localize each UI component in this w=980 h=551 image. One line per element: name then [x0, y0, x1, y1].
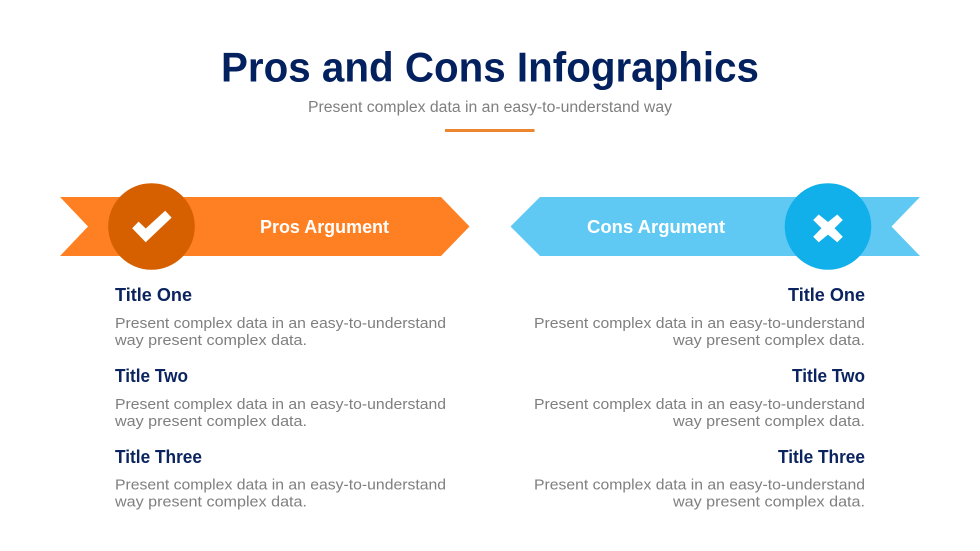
cons item: title two	[534, 366, 865, 430]
pros ribbon banner	[60, 197, 470, 256]
cons item: title three: Present complex data in an easy-to-understand	[534, 476, 865, 494]
subtitle: Present complex data in an easy-to-understand way	[308, 99, 672, 116]
cons item: title one	[534, 285, 865, 349]
pros item: title one: way present complex data.	[114, 332, 307, 349]
icon: check badge	[108, 183, 195, 270]
cons item: title two: way present complex data.	[672, 413, 865, 430]
pros item: title two: Title Two	[115, 366, 188, 386]
pros item: title three: Title Three	[115, 447, 202, 467]
accent rule	[445, 129, 534, 132]
icon: cross badge	[785, 183, 871, 270]
cons item: title one: way present complex data.	[672, 332, 865, 349]
pros heading: Pros Argument	[260, 217, 389, 237]
panel: cons	[510, 183, 920, 510]
cons heading: Cons Argument	[587, 217, 725, 237]
pros item: title two: Present complex data in an easy-to-understand	[115, 396, 446, 413]
pros item: title three	[114, 447, 446, 510]
pros item: title one	[114, 285, 446, 349]
cons item: title three: Title Three	[778, 447, 865, 467]
cons item: title two: Title Two	[792, 366, 865, 386]
cons item: title one: Title One	[788, 285, 865, 305]
pros item: title one: Title One	[115, 285, 192, 305]
pros item: title three: Present complex data in an easy-to-understand	[115, 476, 446, 494]
cons item: title three	[534, 447, 865, 510]
pros item: title one: Present complex data in an easy-to-understand	[115, 315, 446, 332]
title: Pros and Cons Infographics	[221, 44, 759, 90]
pros item: title three: way present complex data.	[114, 494, 307, 510]
cons item: title three: way present complex data.	[672, 494, 865, 510]
cons item: title one: Present complex data in an easy-to-understand	[534, 315, 865, 332]
cons item: title two: Present complex data in an easy-to-understand	[534, 396, 865, 413]
panel: pros	[60, 183, 470, 510]
pros item: title two: way present complex data.	[114, 413, 307, 430]
header	[221, 44, 759, 132]
pros item: title two	[114, 366, 446, 430]
cons ribbon banner	[510, 197, 920, 256]
